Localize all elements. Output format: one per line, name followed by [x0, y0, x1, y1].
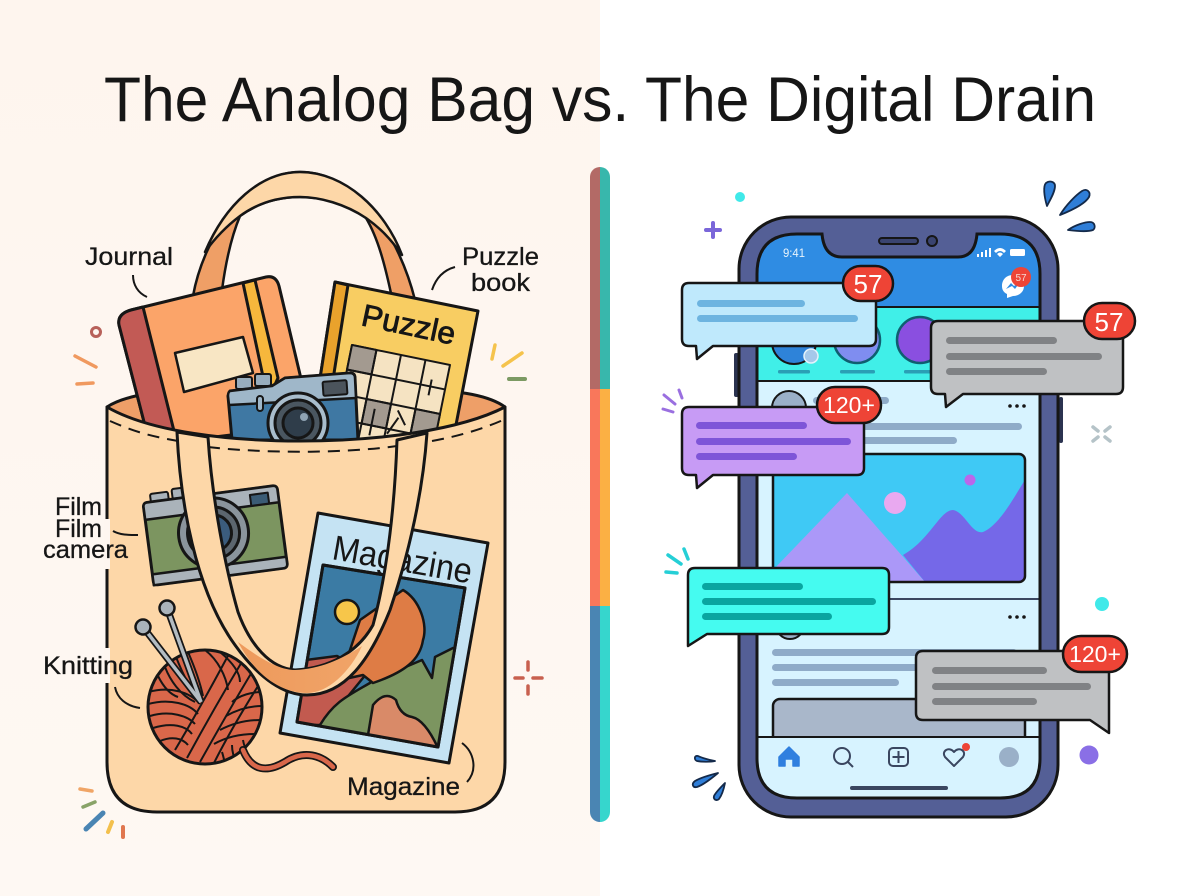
- label leader lines: [113, 267, 473, 782]
- puzzle grid: [332, 345, 450, 463]
- speaker and camera: [879, 236, 937, 246]
- teal bubble text bars: [702, 583, 876, 620]
- badge: 57: [1084, 303, 1135, 339]
- post image: [773, 454, 1025, 582]
- post two: [772, 615, 1026, 736]
- phone body: [739, 217, 1058, 817]
- home indicator: [850, 786, 948, 790]
- status bar: 9:41: [783, 248, 805, 260]
- icon: add: [889, 748, 908, 766]
- icon: heart: [944, 749, 964, 766]
- badge: 57: 57: [854, 269, 882, 299]
- blue camera: [228, 373, 358, 453]
- notification dot: [962, 743, 970, 751]
- stitching: [110, 420, 503, 452]
- notification bubble: teal: [688, 568, 889, 646]
- notification bubble: grey bottom: [916, 636, 1127, 733]
- badge: 120+: [1063, 636, 1127, 672]
- decorative sparks: analog side: [75, 328, 542, 837]
- label: journal: Journal: [85, 243, 173, 271]
- badge: 120+: [817, 387, 881, 423]
- left background panel: [0, 0, 600, 896]
- bag handle back: [193, 172, 415, 300]
- profile avatar: [999, 747, 1019, 767]
- bag front body: [107, 407, 505, 812]
- magazine: [280, 513, 488, 763]
- knitting needles: [136, 600, 201, 702]
- badge: 120+: 120+: [823, 392, 875, 418]
- badge: 120+: 120+: [1069, 641, 1121, 667]
- panel: smartphone: [734, 217, 1063, 817]
- label: film camera: Film: [55, 493, 102, 521]
- notification bubble: grey top: [931, 303, 1135, 407]
- border gaps behind labels: [104, 519, 110, 569]
- magazine title: Magazine: [330, 528, 475, 591]
- badge: 57: [843, 266, 893, 301]
- icon: search: [834, 748, 853, 767]
- status bar: [783, 248, 1025, 260]
- app header: [757, 234, 1040, 307]
- label: film camera: Film: [55, 515, 102, 543]
- bag interior: [107, 390, 505, 450]
- journal: [119, 277, 312, 445]
- label: film camera: [43, 493, 128, 564]
- label: puzzle book: Puzzle: [462, 243, 539, 271]
- bottom nav bar: [758, 736, 1038, 790]
- yarn ball with needles: [136, 600, 333, 768]
- panel: analog tote bag: [104, 172, 505, 812]
- icon: messenger with badge: [1002, 267, 1031, 298]
- badge: 57: 57: [1095, 307, 1123, 337]
- icon: home: [779, 747, 799, 766]
- icon: blue splash bottom: [693, 756, 725, 800]
- stories row: [757, 307, 1040, 381]
- puzzle book title: Puzzle: [359, 298, 459, 352]
- side buttons: [734, 353, 1063, 443]
- label: puzzle book: [462, 243, 539, 297]
- title: The Analog Bag vs. The Digital Drain: [104, 65, 1096, 135]
- icon: blue splash top: [1044, 182, 1095, 231]
- label: film camera: camera: [43, 536, 128, 564]
- label: knitting: Knitting: [43, 652, 133, 680]
- center divider bar: [590, 167, 610, 822]
- label: magazine: Magazine: [347, 773, 460, 801]
- phone screen: [757, 234, 1040, 798]
- label: puzzle book: book: [471, 269, 531, 297]
- notification bubble: light blue: [682, 266, 893, 359]
- puzzle book: [312, 282, 478, 463]
- bag handle front: [177, 432, 427, 695]
- screen outline: [757, 234, 1040, 798]
- film camera: [142, 475, 288, 585]
- post one: [772, 391, 1026, 582]
- analog labels: [43, 243, 539, 801]
- yarn tail: [243, 750, 333, 768]
- notification bubble: purple: [682, 387, 881, 488]
- decorative sparks: digital side: [663, 192, 1110, 764]
- icon: messenger with badge: 57: [1015, 273, 1027, 284]
